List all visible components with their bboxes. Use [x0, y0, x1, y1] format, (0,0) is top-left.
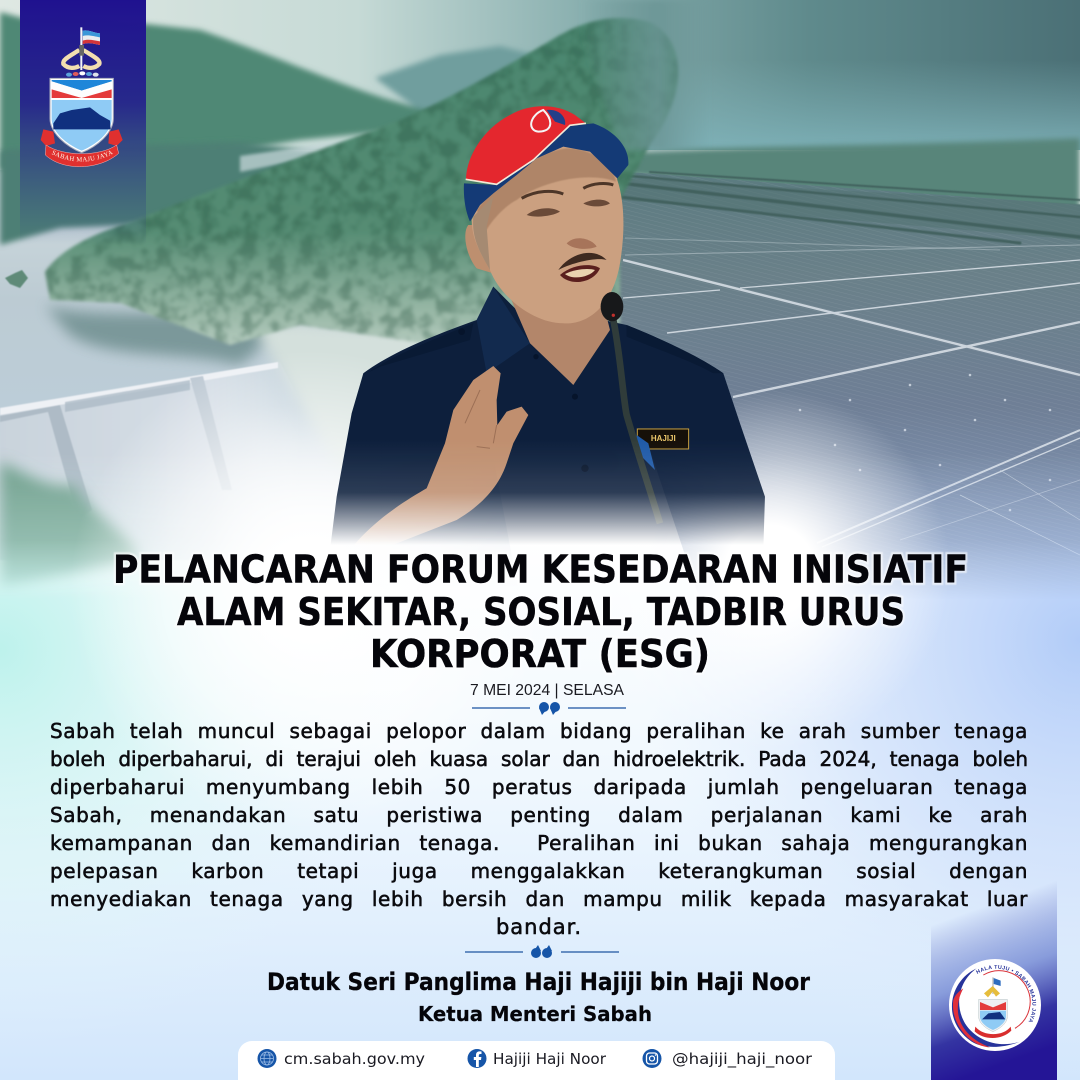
- body quote text: Sabah telah muncul sebagai pelopor dalam bidang peralihan ke arah sumber tenaga: [50, 719, 1028, 743]
- body quote text: diperbaharui menyumbang lebih 50 peratus daripada jumlah pengeluaran tenaga: [50, 775, 1028, 799]
- icon: Sabah state crest: [40, 27, 123, 167]
- body quote text: Sabah, menandakan satu peristiwa penting dalam perjalanan kami ke arah: [50, 803, 1028, 827]
- instagram handle: @hajiji_haji_noor: [672, 1050, 813, 1069]
- sky: [0, 0, 1080, 150]
- pale fog lobe of hillside: [252, 325, 419, 428]
- cap: [466, 106, 586, 184]
- speaker role: Ketua Menteri Sabah: [418, 1002, 652, 1026]
- solar panel frame lines: [623, 238, 1080, 555]
- foreground trees lower left: [0, 462, 140, 590]
- title: PELANCARAN FORUM KESEDARAN INISIATIF: [113, 548, 968, 592]
- shirt buttons: [458, 328, 589, 472]
- solar farm: [600, 170, 1080, 600]
- body quote text: pelepasan karbon tetapi juga menggalakkan keterangkuman sosial dengan: [50, 859, 1028, 883]
- date line: 7 MEI 2024 | SELASA: [470, 682, 625, 699]
- hill reflection on lake: [45, 305, 300, 365]
- icon: Sabah state crest: SABAH MAJU JAYA: [52, 150, 114, 162]
- river highlight: [238, 147, 322, 174]
- icon: globe: [258, 1049, 276, 1068]
- website: cm.sabah.gov.my: [284, 1050, 425, 1068]
- body quote text: bandar.: [496, 915, 582, 939]
- icon: instagram: [642, 1049, 662, 1068]
- icon: opening quotation marks: [539, 702, 560, 715]
- microphone: [613, 317, 660, 523]
- facebook name: Hajiji Haji Noor: [493, 1050, 607, 1068]
- ear: [465, 225, 493, 273]
- icon: facebook: [468, 1049, 486, 1068]
- face: [472, 145, 623, 323]
- title glow: PELANCARAN FORUM KESEDARAN INISIATIF: [113, 548, 968, 592]
- body quote text: [50, 719, 1028, 939]
- name badge: HAJIJI: [651, 434, 676, 443]
- green hillside: [43, 17, 679, 346]
- body quote text: boleh diperbaharui, di terajui oleh kuasa solar dan hidroelektrik. Pada 2024, tenaga boleh: [50, 747, 1028, 771]
- icon: Hala Tuju seal: HALA TUJU • SABAH MAJU JAYA: [976, 965, 1036, 1022]
- panel: contact bar: [238, 1041, 835, 1080]
- body quote text: menyediakan tenaga yang lebih bersih dan mampu milik kepada masyarakat luar: [50, 887, 1028, 911]
- name badge: [637, 429, 689, 449]
- panel: top-left blue tab: [20, 0, 146, 245]
- panel: bottom-right blue tab: [931, 880, 1057, 1080]
- icon: closing quotation marks: [531, 945, 552, 958]
- shaded water below the far mountains: [0, 142, 320, 245]
- illustration: speaker in cap and navy shirt: [330, 106, 765, 550]
- dam wall: [0, 362, 278, 559]
- neck: [510, 297, 610, 385]
- mustache and mouth: [558, 253, 607, 270]
- body quote text: kemampanan dan kemandirian tenaga. Peralihan ini bukan sahaja mengurangkan: [50, 831, 1028, 855]
- islet: [5, 270, 28, 288]
- divider: closing quote: [465, 945, 619, 958]
- title glow: ALAM SEKITAR, SOSIAL, TADBIR URUS: [177, 590, 905, 635]
- title glow: [113, 548, 968, 677]
- hand: [350, 366, 528, 550]
- divider: opening quote: [472, 702, 626, 715]
- photo scene: lake, dam, hills and solar farm: [0, 0, 1080, 600]
- title: KORPORAT (ESG): [370, 632, 710, 677]
- lake: [0, 170, 520, 600]
- far mountains: [0, 12, 1080, 215]
- speaker name: Datuk Seri Panglima Haji Hajiji bin Haji Noor: [267, 968, 810, 996]
- title glow: KORPORAT (ESG): [370, 632, 710, 677]
- title: [113, 548, 968, 677]
- shirt: [330, 287, 765, 550]
- title: ALAM SEKITAR, SOSIAL, TADBIR URUS: [177, 590, 905, 635]
- icon: Hala Tuju seal: [949, 959, 1041, 1051]
